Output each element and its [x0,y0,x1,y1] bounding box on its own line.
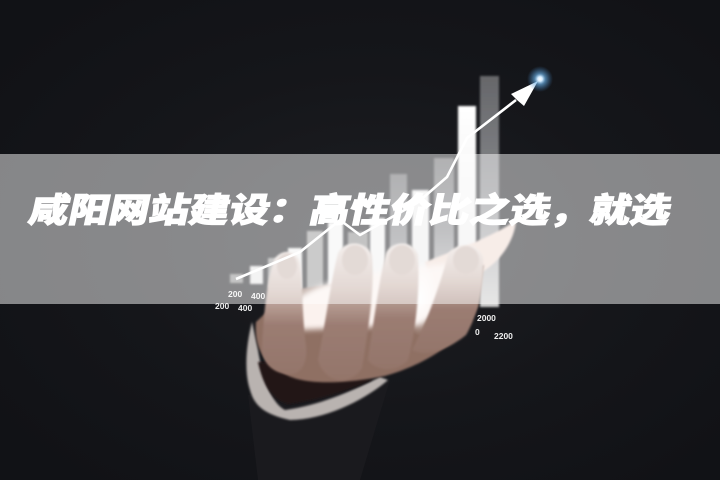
finger 1 [262,252,306,374]
palm [256,265,484,382]
axis labels: 0 [475,327,480,337]
finger nails [277,245,479,279]
axis labels: 2000 [477,313,496,323]
shirt sleeve [248,380,390,480]
axis labels: 400 [238,303,252,313]
axis labels: 2200 [494,331,513,341]
axis labels: 200 [228,289,242,299]
axis labels: 400 [251,291,265,301]
bright gaps between fingers [402,260,438,336]
growth line [236,100,516,279]
finger 3 [368,243,419,369]
finger 2 [318,243,373,380]
palm light [296,262,470,330]
finger 4 [412,245,483,353]
bar chart [230,76,499,307]
hand [246,220,516,480]
light flare [527,66,553,92]
axis labels [215,289,513,341]
title: 咸阳网站建设：高性价比之选，就选 [25,191,675,229]
axis labels: 200 [215,301,229,311]
shirt cuff [246,322,388,420]
translucent title band [0,154,720,304]
arrow head [511,81,538,106]
thumb [425,220,516,285]
cuff shadow [258,362,372,404]
